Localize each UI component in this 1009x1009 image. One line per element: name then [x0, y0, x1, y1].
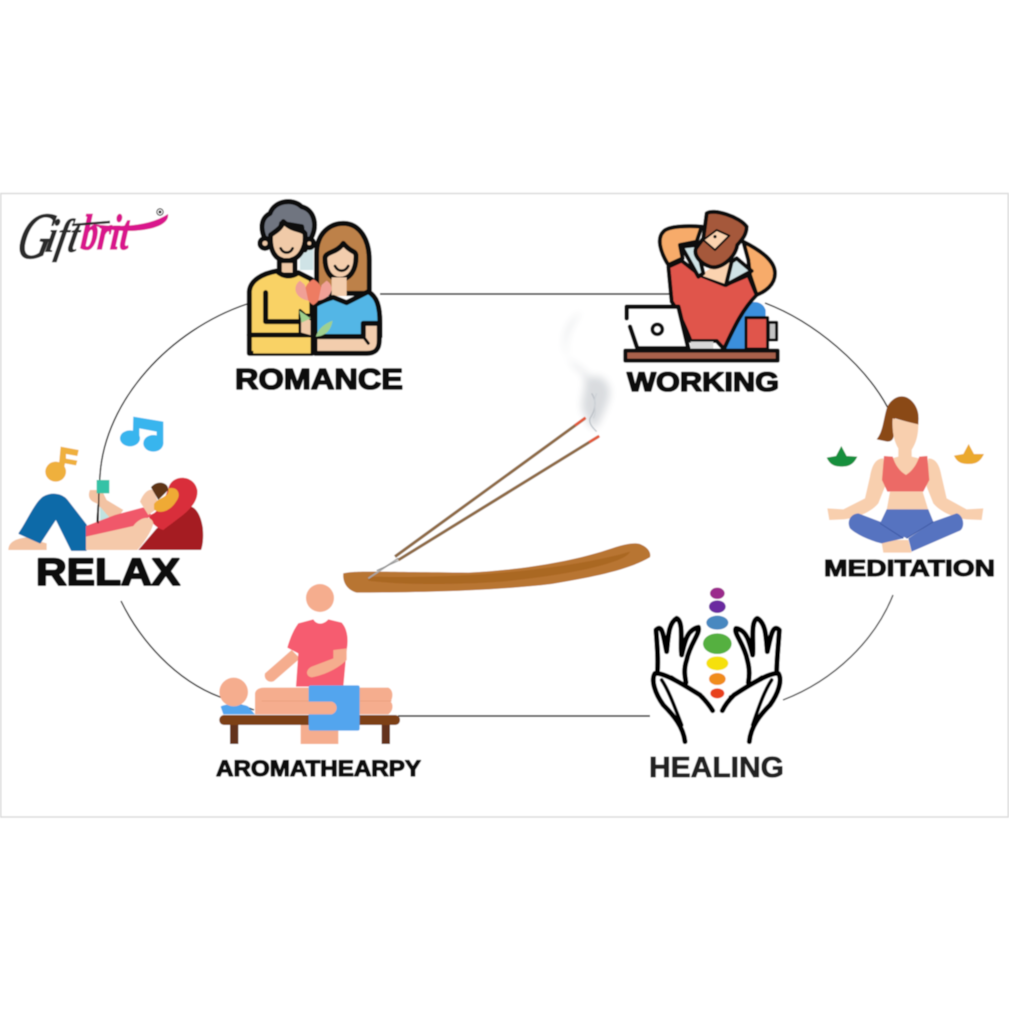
label: aromathearpy: AROMATHEARPY	[216, 756, 421, 781]
phone	[97, 480, 109, 493]
icon: massage aromatherapy	[219, 584, 400, 744]
connecting loop lines	[97, 294, 893, 716]
man face	[270, 222, 305, 261]
shirt	[86, 507, 152, 537]
headphones	[154, 488, 179, 512]
table legs	[230, 722, 390, 744]
table top	[219, 715, 400, 725]
icon: woman meditating	[827, 396, 984, 553]
shirt	[668, 261, 757, 349]
logo: Gift brit: ift	[42, 210, 86, 263]
tray	[343, 543, 650, 593]
waist	[887, 492, 928, 510]
patient head	[219, 678, 248, 706]
arms	[827, 458, 885, 520]
arms	[660, 226, 702, 265]
top	[882, 456, 929, 492]
smoke	[564, 312, 610, 432]
therapist head	[306, 584, 334, 612]
right hand	[722, 618, 780, 742]
green lotus	[827, 446, 857, 467]
face	[140, 490, 160, 515]
hair	[877, 396, 919, 442]
line behind phone	[98, 480, 99, 523]
woman face	[325, 243, 356, 279]
burning tips	[575, 418, 586, 425]
logo: Gift brit: G	[10, 200, 63, 273]
logo: Gift brit: brit	[79, 204, 134, 260]
framed panel	[1, 194, 1008, 817]
left hand	[653, 618, 713, 742]
icon: romance couple	[249, 202, 380, 353]
woman hair	[317, 223, 369, 293]
woman arm	[315, 323, 379, 353]
patient pillow	[221, 704, 255, 714]
patient arm	[255, 702, 337, 714]
legs	[849, 509, 963, 552]
legs	[19, 495, 86, 550]
therapist arm front	[307, 648, 347, 677]
desk	[625, 351, 778, 361]
arm holding phone	[89, 490, 123, 523]
flower	[305, 279, 322, 305]
silver stick bases	[368, 558, 398, 578]
pillow	[138, 506, 203, 550]
label: working: WORKING	[627, 367, 779, 397]
label: meditation: MEDITATION	[824, 555, 995, 581]
incense stick holder	[343, 312, 650, 593]
logo: Gift brit	[10, 200, 168, 273]
patient body	[255, 688, 393, 714]
blue music note	[120, 417, 163, 452]
icon: person relaxing with music	[8, 417, 203, 550]
yellow lotus	[954, 444, 984, 464]
label: romance: ROMANCE	[235, 364, 403, 396]
therapist shirt	[287, 619, 348, 687]
incense sticks	[395, 418, 585, 557]
hair	[151, 483, 168, 500]
laptop	[627, 307, 688, 348]
head	[695, 212, 747, 267]
chakra stones	[703, 588, 732, 698]
towel	[309, 685, 360, 731]
man shirt	[249, 271, 312, 353]
foot	[882, 540, 912, 553]
icon: healing hands with chakras	[653, 588, 780, 742]
feet	[8, 537, 47, 550]
label: relax: RELAX	[36, 552, 181, 594]
icon: man working at laptop	[625, 212, 778, 361]
woman shirt	[315, 292, 380, 337]
blue chair	[725, 302, 766, 349]
infographic artwork	[1, 194, 1008, 817]
lower arm and body	[86, 518, 153, 550]
label: healing: HEALING	[649, 752, 784, 784]
therapist arm back	[265, 650, 300, 682]
head and neck	[883, 418, 928, 477]
man hair	[262, 202, 315, 250]
therapist legs	[301, 722, 338, 744]
orange music note	[45, 447, 79, 482]
neck and collar	[700, 258, 730, 284]
mug	[768, 322, 777, 340]
